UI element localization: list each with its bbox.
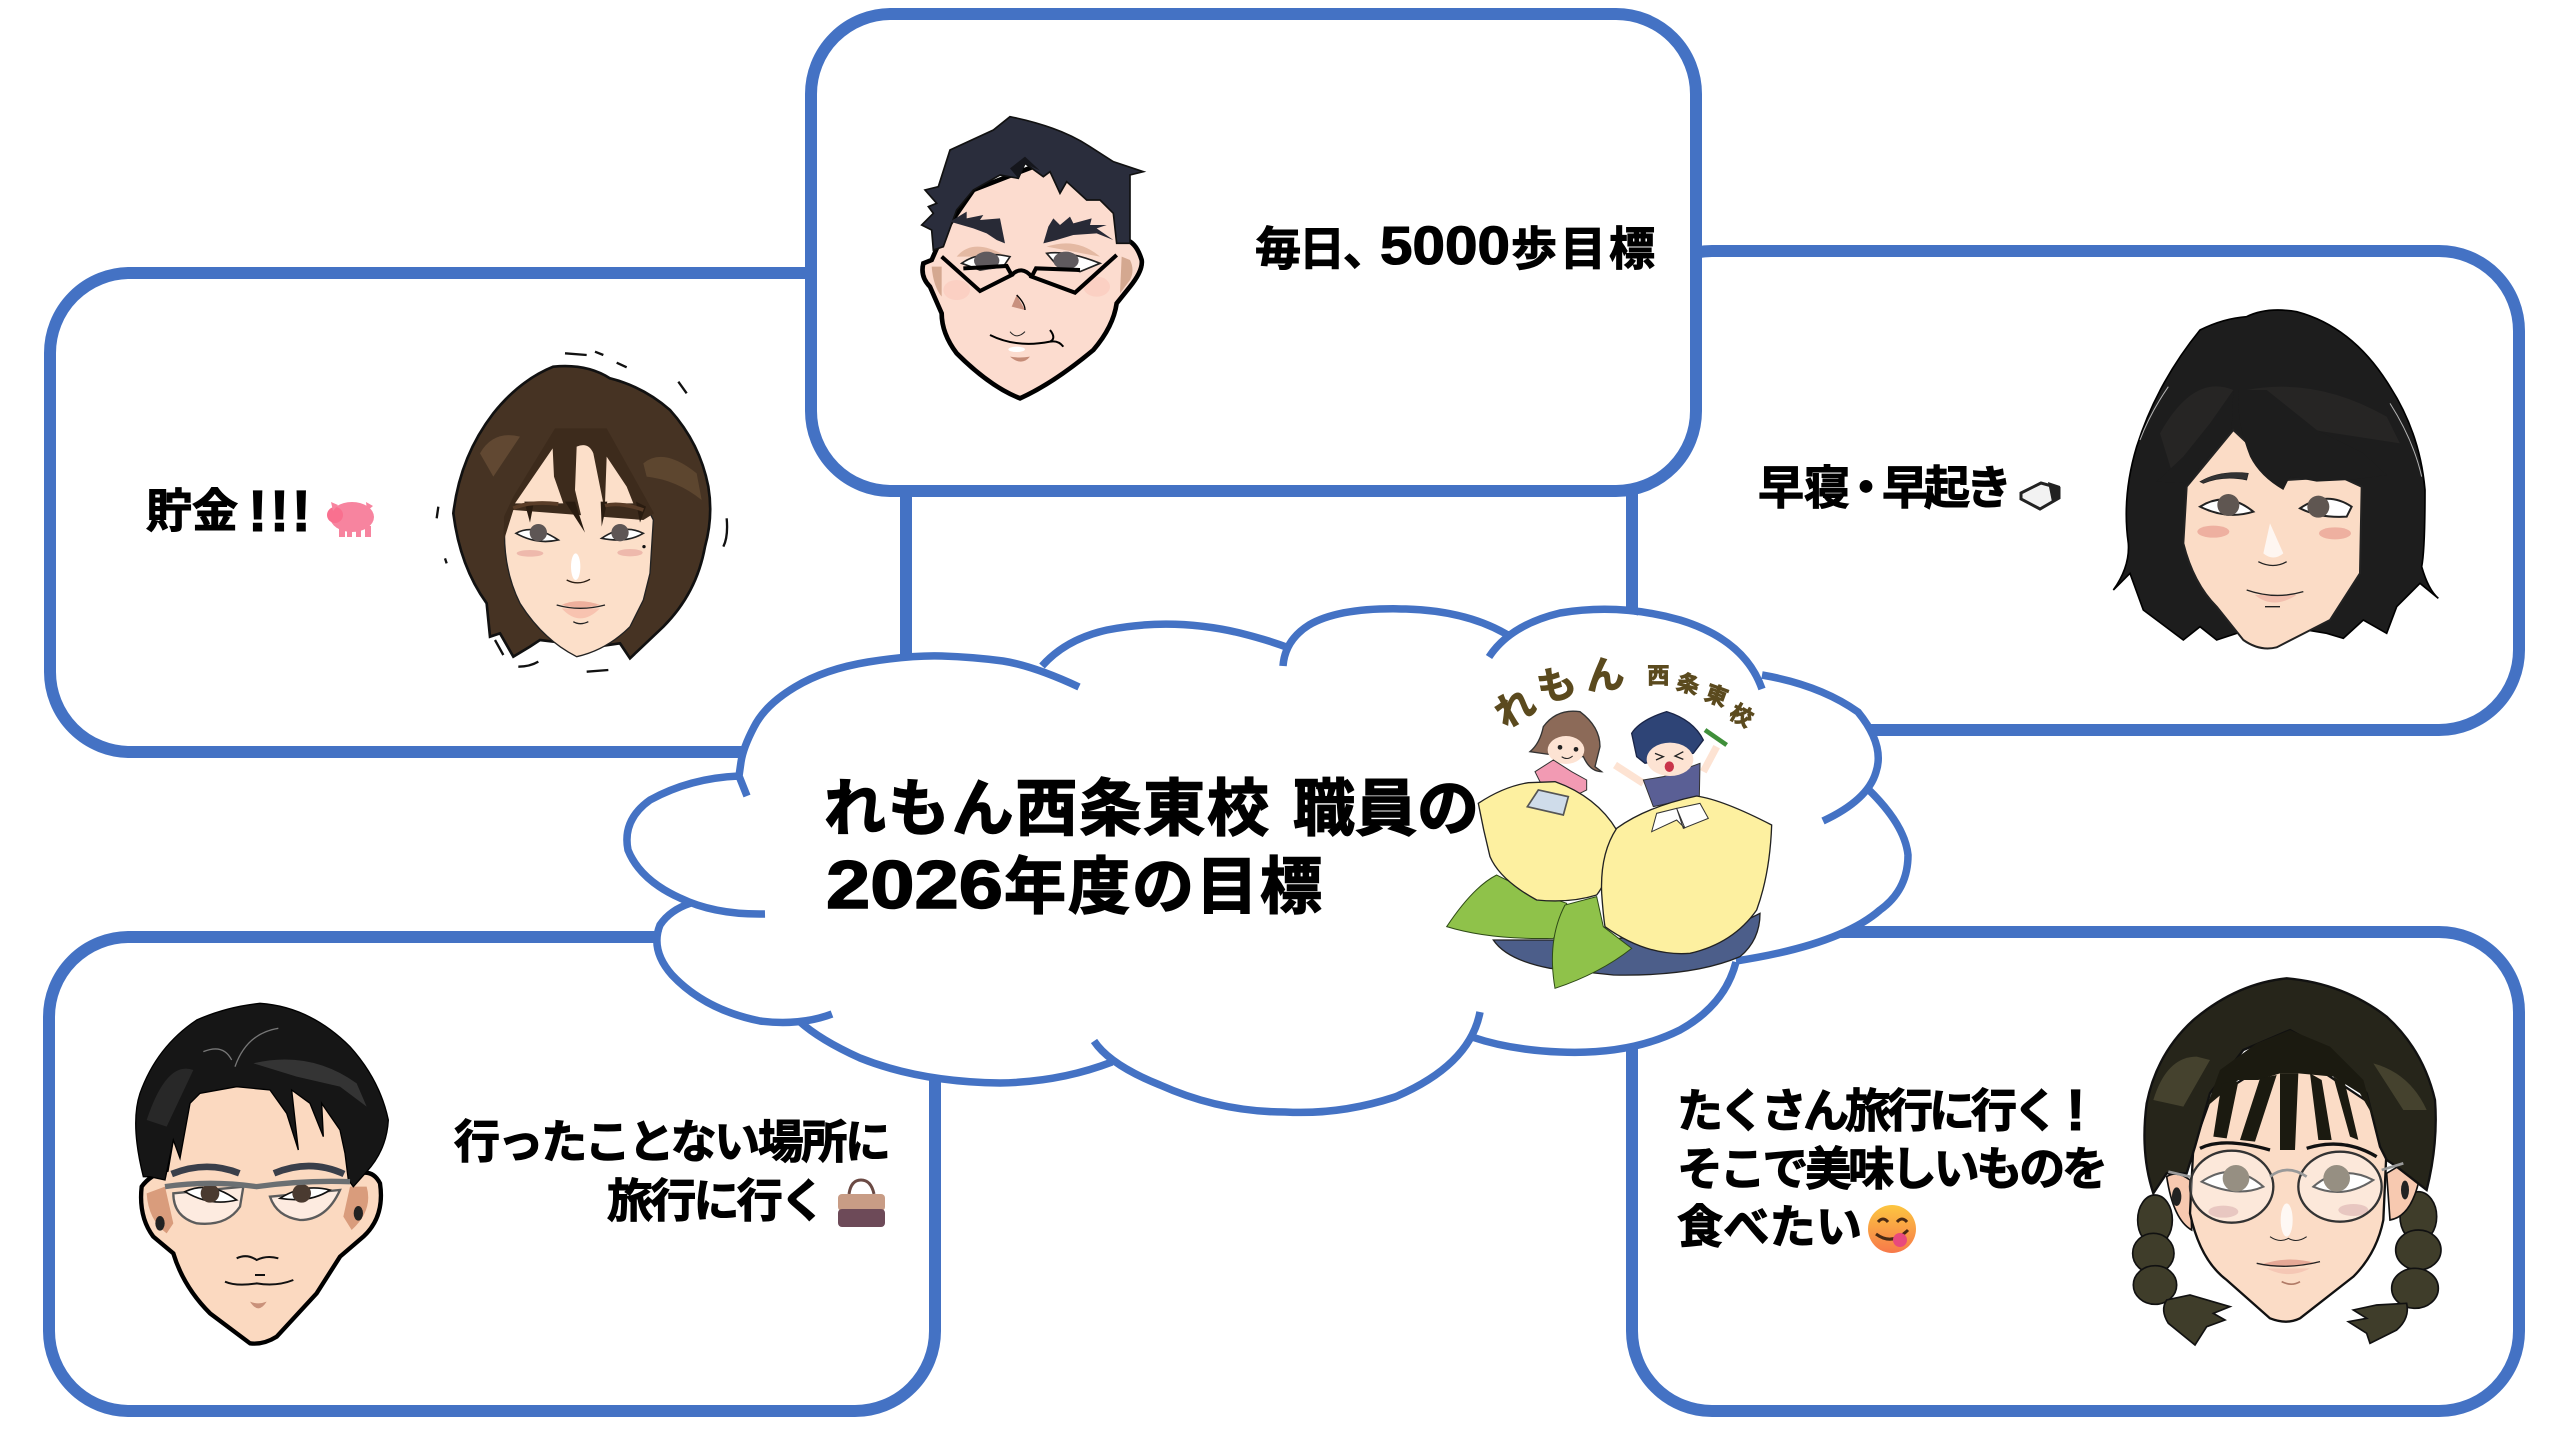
panel: left staff member bbox=[50, 273, 906, 752]
logo text: 東 bbox=[1702, 680, 1731, 711]
goal text: early to bed bbox=[1758, 462, 2012, 514]
goal text: savings bbox=[146, 479, 311, 544]
goal text: early to bed: 早寝 bbox=[1758, 462, 1850, 514]
title: 年度の目標 bbox=[1004, 853, 1322, 922]
goal text: early to bed: ・ bbox=[1843, 462, 1889, 514]
goal text: unvisited places: 行ったことない場所に bbox=[454, 1116, 891, 1168]
portrait: woman with braids and round glasses bbox=[2133, 978, 2441, 1345]
icon: bed bbox=[2021, 482, 2060, 509]
portrait: woman with brown hair bbox=[437, 352, 727, 672]
logo text: 西 bbox=[1647, 663, 1669, 688]
goal text: travel and food: 食べたい bbox=[1677, 1201, 1862, 1253]
icon: handbag bbox=[838, 1180, 885, 1227]
icon: yummy face emoji bbox=[1868, 1205, 1916, 1253]
goal text: unvisited places bbox=[454, 1116, 891, 1227]
panel: bottom-right staff member bbox=[1632, 932, 2519, 1411]
icon: piggy bank bbox=[327, 502, 374, 537]
goal text: unvisited places: 旅行に行く bbox=[607, 1175, 826, 1227]
goal text: savings: !!! bbox=[248, 479, 311, 544]
goal text: daily steps bbox=[1255, 216, 1655, 276]
boy character bbox=[1615, 712, 1727, 807]
goal text: daily steps: 毎日、 bbox=[1255, 223, 1389, 275]
title bbox=[824, 775, 1479, 923]
portrait: man with rectangular glasses bbox=[922, 117, 1143, 398]
cloud: central title bubble bbox=[626, 609, 1908, 1112]
goal text: travel and food bbox=[1677, 1078, 2108, 1253]
goal text: travel and food: ! bbox=[2066, 1078, 2085, 1143]
girl character bbox=[1530, 711, 1602, 795]
title: れもん西条東校 bbox=[824, 775, 1269, 844]
logo text bbox=[1488, 653, 1757, 737]
title: 職員の bbox=[1293, 775, 1479, 844]
goal text: daily steps: 歩目標 bbox=[1511, 223, 1655, 275]
goal text: travel and food: たくさん旅行に行く bbox=[1677, 1085, 2059, 1137]
title: 2026 bbox=[826, 847, 1003, 923]
panel frame bbox=[50, 273, 906, 752]
goal text: early to bed: 早起き bbox=[1882, 462, 2012, 514]
logo text: れ bbox=[1488, 681, 1543, 737]
goal text: daily steps: 5000 bbox=[1380, 216, 1510, 276]
logo text: も bbox=[1533, 660, 1581, 712]
portrait: man with glasses bbox=[136, 1003, 388, 1344]
logo text: ん bbox=[1584, 653, 1626, 699]
panel: bottom-left staff member bbox=[49, 937, 935, 1411]
panel: top staff member bbox=[811, 14, 1696, 491]
logo text: 校 bbox=[1725, 699, 1757, 732]
goal text: savings: 貯金 bbox=[146, 485, 238, 537]
logo: lemon school bbox=[1447, 653, 1772, 988]
goal text: travel and food: そこで美味しいものを bbox=[1677, 1143, 2108, 1195]
logo text: 条 bbox=[1674, 669, 1702, 699]
panel: right staff member bbox=[1632, 251, 2519, 730]
portrait: woman with black bob bbox=[2113, 310, 2438, 649]
